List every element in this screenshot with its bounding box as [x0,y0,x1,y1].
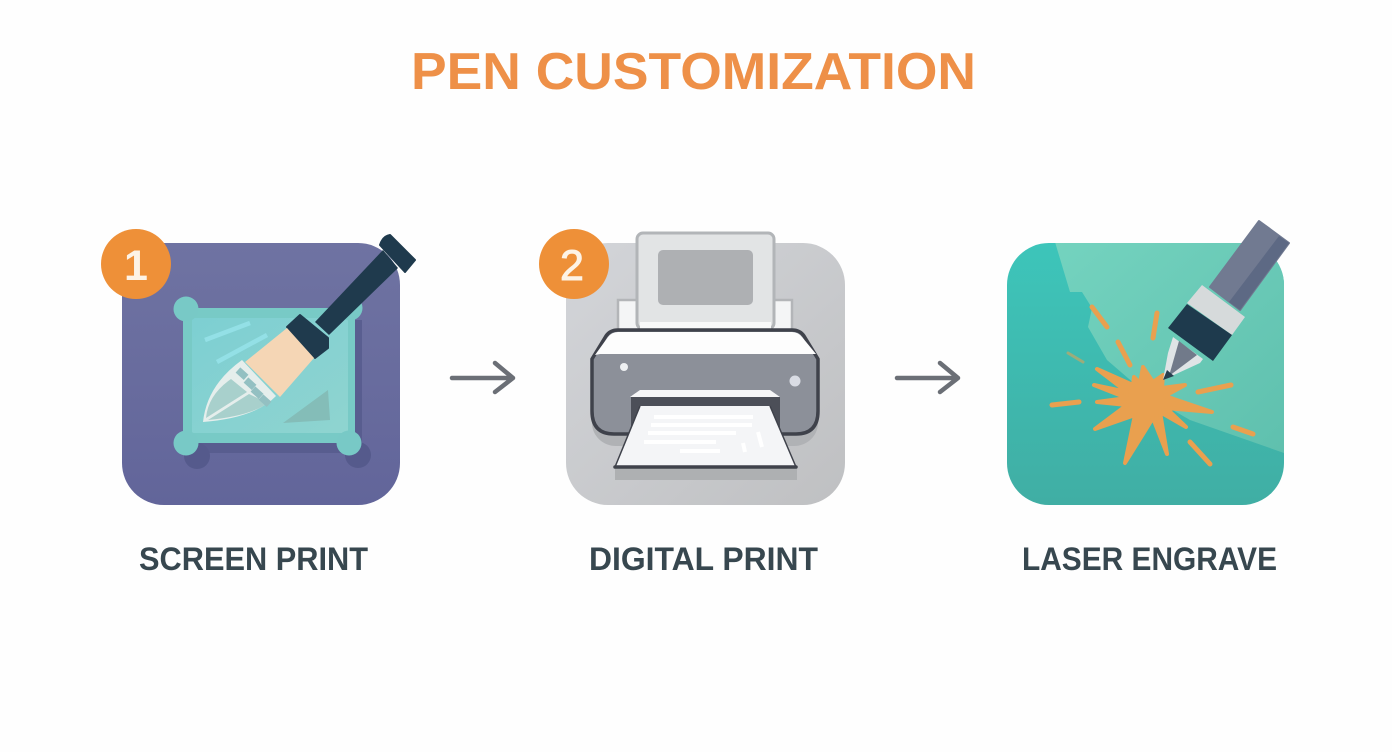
number badge 1: 1 [124,242,148,290]
label: laser engrave: LASER ENGRAVE [1022,541,1277,577]
arrow 1 [452,363,513,392]
title: PEN CUSTOMIZATION [411,43,976,101]
light beam [1055,242,1284,453]
panel background: screen print [122,243,400,505]
arrow 2 [897,363,958,392]
label: screen print: SCREEN PRINT [139,541,368,577]
panel background: laser engrave [1007,243,1284,505]
label: digital print: DIGITAL PRINT [589,541,818,577]
icon: brush [203,235,415,422]
panel: laser engrave [1007,221,1289,505]
icon: printer [592,233,818,480]
icon: laser pen [1163,221,1289,380]
number badge 1 [101,229,171,299]
panel: screen print [101,229,415,505]
panel: digital print [539,229,845,505]
number badge 2 [539,229,609,299]
panel background: digital print [566,243,845,505]
icon: sparks [1052,307,1253,464]
number badge 2: 2 [560,242,584,290]
icon: screen frame [174,296,371,469]
